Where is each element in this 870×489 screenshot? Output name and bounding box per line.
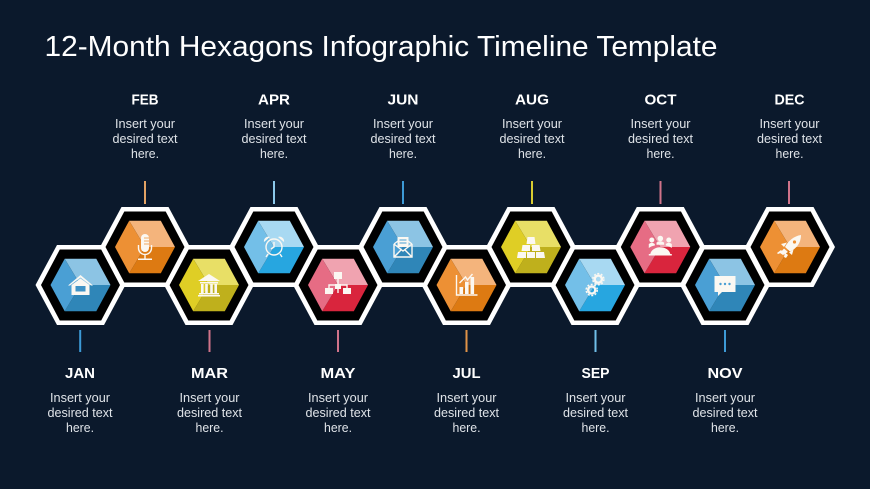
connector: MAR <box>208 330 210 352</box>
hexagon: MAY <box>293 245 383 325</box>
icon: bar chart <box>456 274 478 295</box>
label: JUN: JUN <box>388 92 418 108</box>
connector: APR <box>273 181 275 204</box>
label: JAN: here. <box>66 421 94 435</box>
label: FEB <box>112 92 178 161</box>
connector: OCT <box>660 181 662 204</box>
label: NOV <box>692 365 758 435</box>
label: DEC <box>757 92 823 161</box>
label: DEC: DEC <box>774 92 805 108</box>
icon: envelope <box>394 237 412 257</box>
connector: FEB <box>144 181 146 204</box>
label: OCT <box>628 92 694 161</box>
label: AUG: AUG <box>515 92 549 108</box>
label: AUG <box>500 92 565 161</box>
label: MAY: Insert your <box>308 391 368 405</box>
hexagon: MAR <box>164 245 254 325</box>
hexagon: NOV <box>680 245 770 325</box>
label: FEB: FEB <box>132 92 159 108</box>
label: JUL <box>434 365 500 435</box>
label: JUL: JUL <box>452 365 480 382</box>
label: DEC: here. <box>776 147 804 161</box>
label: OCT: Insert your <box>630 117 690 131</box>
hexagon: FEB <box>100 207 190 287</box>
label: SEP: desired text <box>563 406 629 420</box>
label: SEP: here. <box>582 421 610 435</box>
connector: DEC <box>788 181 790 204</box>
label: APR: APR <box>258 92 290 108</box>
label: AUG: Insert your <box>502 117 562 131</box>
connector: MAY <box>337 330 339 352</box>
label: OCT: desired text <box>628 132 694 146</box>
label: FEB: here. <box>131 147 159 161</box>
label: MAY: desired text <box>306 406 371 420</box>
hexagon: AUG <box>486 207 576 287</box>
title: 12-Month Hexagons Infographic Timeline Template <box>44 31 717 63</box>
label: OCT: here. <box>646 147 674 161</box>
connector: AUG <box>531 181 533 204</box>
label: MAR <box>177 365 243 435</box>
label: DEC: Insert your <box>760 117 820 131</box>
label: JUN <box>370 92 436 161</box>
icon: rocket <box>777 235 801 258</box>
label: JUL: desired text <box>434 406 500 420</box>
icon: house <box>68 275 93 295</box>
connector: NOV <box>724 330 726 352</box>
label: MAR: desired text <box>177 406 243 420</box>
icon: gears <box>586 274 604 296</box>
label: APR <box>242 92 307 161</box>
connector: JUN <box>402 181 404 204</box>
label: JAN: desired text <box>48 406 113 420</box>
label: APR: desired text <box>242 132 307 146</box>
hexagon: JUL <box>422 245 512 325</box>
label: JAN: Insert your <box>50 391 110 405</box>
icon: microphone <box>138 234 152 260</box>
hexagon: SEP <box>550 245 640 325</box>
label: MAY <box>306 365 371 435</box>
icon: chat bubble <box>714 276 736 296</box>
hexagon: JAN <box>36 245 126 325</box>
label: MAY: here. <box>324 421 352 435</box>
label: APR: Insert your <box>244 117 304 131</box>
label: OCT: OCT <box>644 92 676 108</box>
label: MAR: Insert your <box>180 391 240 405</box>
hexagon: APR <box>229 207 319 287</box>
hexagon: JUN <box>358 207 448 287</box>
label: NOV: here. <box>711 421 739 435</box>
label: JUN: desired text <box>370 132 436 146</box>
icon: alarm clock <box>264 237 284 257</box>
label: NOV: desired text <box>692 406 758 420</box>
icon: flowchart <box>325 272 351 294</box>
icon: meeting people <box>649 236 672 256</box>
label: JUL: Insert your <box>436 391 496 405</box>
connector: JAN <box>79 330 81 352</box>
hexagon: DEC <box>745 207 835 287</box>
label: JAN <box>48 365 113 435</box>
label: JUL: here. <box>452 421 480 435</box>
hexagon: OCT <box>615 207 705 287</box>
label: AUG: desired text <box>500 132 565 146</box>
label: SEP <box>563 365 629 435</box>
label: MAR: here. <box>196 421 224 435</box>
label: JAN: JAN <box>65 365 95 382</box>
label: FEB: Insert your <box>115 117 175 131</box>
label: DEC: desired text <box>757 132 823 146</box>
label: MAR: MAR <box>191 365 228 382</box>
label: SEP: Insert your <box>566 391 626 405</box>
connector: JUL <box>466 330 468 352</box>
label: FEB: desired text <box>112 132 178 146</box>
label: JUN: Insert your <box>373 117 433 131</box>
label: JUN: here. <box>389 147 417 161</box>
label: APR: here. <box>260 147 288 161</box>
label: AUG: here. <box>518 147 546 161</box>
icon: bank <box>198 274 220 296</box>
connector: SEP <box>594 330 596 352</box>
label: NOV: Insert your <box>695 391 755 405</box>
label: MAY: MAY <box>320 365 356 382</box>
label: SEP: SEP <box>582 365 610 382</box>
label: NOV: NOV <box>708 365 742 382</box>
icon: stacked bricks <box>517 237 545 258</box>
